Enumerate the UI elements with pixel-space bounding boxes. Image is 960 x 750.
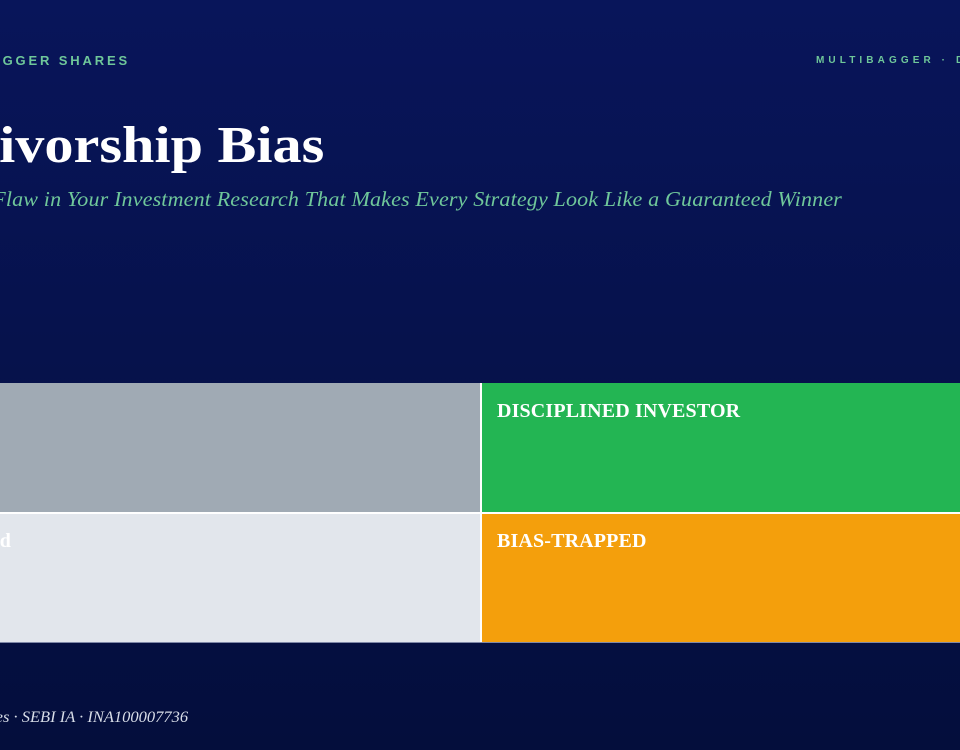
panel: top left <box>0 383 480 512</box>
label: disciplined investor: DISCIPLINED INVESTOR <box>497 400 740 422</box>
panel: disciplined investor <box>482 383 960 512</box>
quadrant grid <box>0 383 960 643</box>
label: bias-trapped: BIAS-TRAPPED <box>497 530 647 552</box>
panel: bottom left <box>0 514 480 642</box>
panel: bias-trapped <box>482 514 960 642</box>
